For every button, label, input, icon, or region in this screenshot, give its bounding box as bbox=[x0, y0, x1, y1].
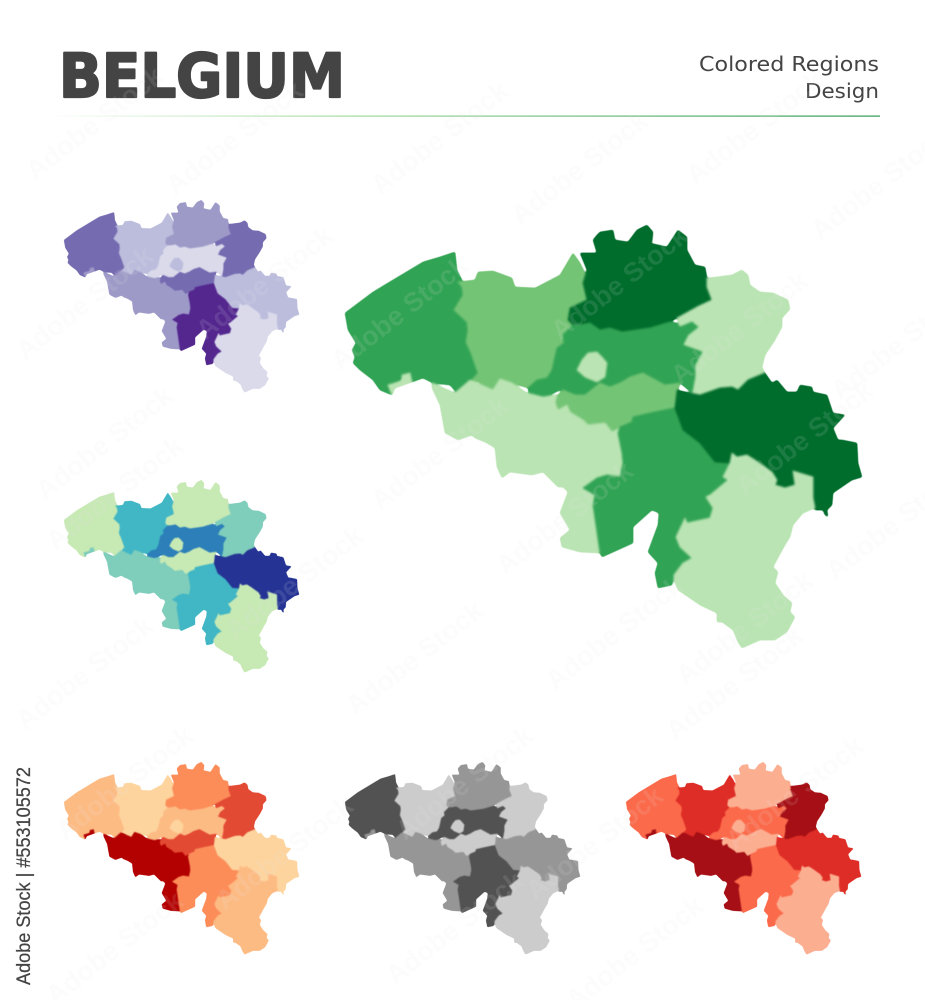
region: Luxembourg bbox=[214, 304, 278, 392]
region: Luxembourg bbox=[495, 866, 559, 954]
region: Limburg bbox=[777, 782, 828, 839]
region: Hainaut bbox=[84, 829, 190, 911]
map: orange Belgium bbox=[64, 762, 299, 954]
watermark: Adobe Stock bbox=[540, 570, 689, 696]
region: Antwerp bbox=[165, 762, 231, 811]
watermark: Adobe Stock bbox=[380, 865, 529, 991]
region: Namur bbox=[172, 283, 239, 365]
watermark: Adobe Stock bbox=[365, 75, 514, 201]
region: Brussels bbox=[170, 258, 183, 271]
subtitle: Colored Regions bbox=[699, 52, 879, 76]
region: Limburg bbox=[215, 782, 266, 839]
region: Brussels bbox=[170, 820, 183, 833]
watermark: Adobe Stock bbox=[10, 610, 159, 736]
watermark: Adobe Stock bbox=[210, 790, 359, 916]
region: East Flanders bbox=[114, 213, 174, 275]
watermark: Adobe Stock bbox=[160, 75, 309, 201]
watermark: Adobe Stock bbox=[325, 250, 474, 376]
region: Namur bbox=[583, 408, 730, 588]
region: Limburg bbox=[215, 220, 266, 277]
map: large green Belgium bbox=[345, 225, 862, 648]
watermark: Adobe Stock bbox=[545, 220, 694, 346]
region: Limburg bbox=[677, 270, 790, 395]
region: West Flanders bbox=[626, 774, 686, 839]
subtitle: Design bbox=[805, 79, 879, 103]
watermark: Adobe Stock bbox=[50, 720, 199, 846]
watermark: Adobe Stock bbox=[660, 620, 809, 746]
region: Antwerp bbox=[727, 762, 793, 811]
region: Luxembourg bbox=[214, 866, 278, 954]
region: Antwerp bbox=[165, 200, 231, 249]
region: Liege bbox=[214, 547, 299, 613]
watermark: Adobe Stock bbox=[730, 375, 879, 501]
watermark: Adobe Stock bbox=[720, 730, 869, 856]
region: Liege bbox=[214, 267, 299, 333]
region: East Flanders bbox=[114, 775, 174, 837]
watermark: Adobe Stock bbox=[665, 265, 814, 391]
region: Walloon Brabant bbox=[722, 829, 778, 856]
region: Flemish Brabant bbox=[147, 806, 226, 840]
region: Brussels bbox=[732, 820, 745, 833]
region: Namur bbox=[172, 563, 239, 645]
region: Hainaut bbox=[84, 547, 190, 629]
region: Walloon Brabant bbox=[160, 829, 216, 856]
map: teal-blue Belgium bbox=[64, 480, 299, 672]
region: West Flanders bbox=[345, 252, 478, 395]
watermark: Adobe Stock bbox=[490, 455, 639, 581]
watermark: Adobe Stock bbox=[680, 65, 829, 191]
region: Luxembourg bbox=[674, 453, 815, 648]
watermark: Adobe Stock bbox=[340, 595, 489, 721]
side credit: Adobe Stock | #553105572 bbox=[14, 767, 35, 985]
header rule bbox=[45, 116, 880, 117]
watermark: Adobe Stock bbox=[30, 380, 179, 506]
region: Liege bbox=[214, 829, 299, 895]
region: Liege bbox=[495, 829, 580, 895]
region: West Flanders bbox=[64, 492, 124, 557]
region: West Flanders bbox=[345, 774, 405, 839]
region: Brussels bbox=[577, 352, 607, 382]
watermark: Adobe Stock bbox=[520, 780, 669, 906]
region: Limburg bbox=[496, 782, 547, 839]
region: Walloon Brabant bbox=[555, 373, 680, 432]
title: BELGIUM bbox=[59, 41, 345, 112]
region: Walloon Brabant bbox=[160, 267, 216, 294]
watermark: Adobe Stock bbox=[670, 565, 819, 691]
watermark: Adobe Stock bbox=[190, 220, 339, 346]
region: Namur bbox=[453, 845, 520, 927]
watermark: Adobe Stock bbox=[220, 520, 369, 646]
watermark: Adobe Stock bbox=[505, 105, 654, 231]
watermark: Adobe Stock bbox=[10, 240, 159, 366]
region: Limburg bbox=[215, 500, 266, 557]
region: Namur bbox=[172, 845, 239, 927]
watermark: Adobe Stock bbox=[390, 720, 539, 846]
region: Antwerp bbox=[165, 480, 231, 529]
region: Antwerp bbox=[568, 225, 712, 332]
region: East Flanders bbox=[395, 775, 455, 837]
watermark: Adobe Stock bbox=[40, 430, 189, 556]
region: Flemish Brabant bbox=[147, 244, 226, 278]
region: Antwerp bbox=[446, 762, 512, 811]
region: Brussels bbox=[170, 538, 183, 551]
region: Walloon Brabant bbox=[160, 547, 216, 574]
region: Flemish Brabant bbox=[147, 524, 226, 558]
region: Flemish Brabant bbox=[709, 806, 788, 840]
map: purple Belgium bbox=[64, 200, 299, 392]
region: Liege bbox=[776, 829, 861, 895]
region: Namur bbox=[734, 845, 801, 927]
region: Hainaut bbox=[84, 267, 190, 349]
region: West Flanders bbox=[64, 212, 124, 277]
region: Hainaut bbox=[365, 829, 471, 911]
region: Luxembourg bbox=[214, 584, 278, 672]
map: red Belgium bbox=[626, 762, 861, 954]
watermark: Adobe Stock bbox=[20, 60, 169, 186]
map: grey Belgium bbox=[345, 762, 580, 954]
subtitle bbox=[699, 52, 879, 103]
region: Hainaut bbox=[388, 373, 623, 553]
region: Hainaut bbox=[646, 829, 752, 911]
region: Brussels bbox=[451, 820, 464, 833]
region: Flemish Brabant bbox=[528, 322, 702, 397]
region: East Flanders bbox=[676, 775, 736, 837]
region: East Flanders bbox=[114, 493, 174, 555]
watermark: Adobe Stock bbox=[365, 390, 514, 516]
region: Liege bbox=[675, 373, 862, 517]
region: West Flanders bbox=[64, 774, 124, 839]
region: Luxembourg bbox=[776, 866, 840, 954]
region: East Flanders bbox=[454, 253, 587, 390]
region: Walloon Brabant bbox=[441, 829, 497, 856]
region: Flemish Brabant bbox=[428, 806, 507, 840]
